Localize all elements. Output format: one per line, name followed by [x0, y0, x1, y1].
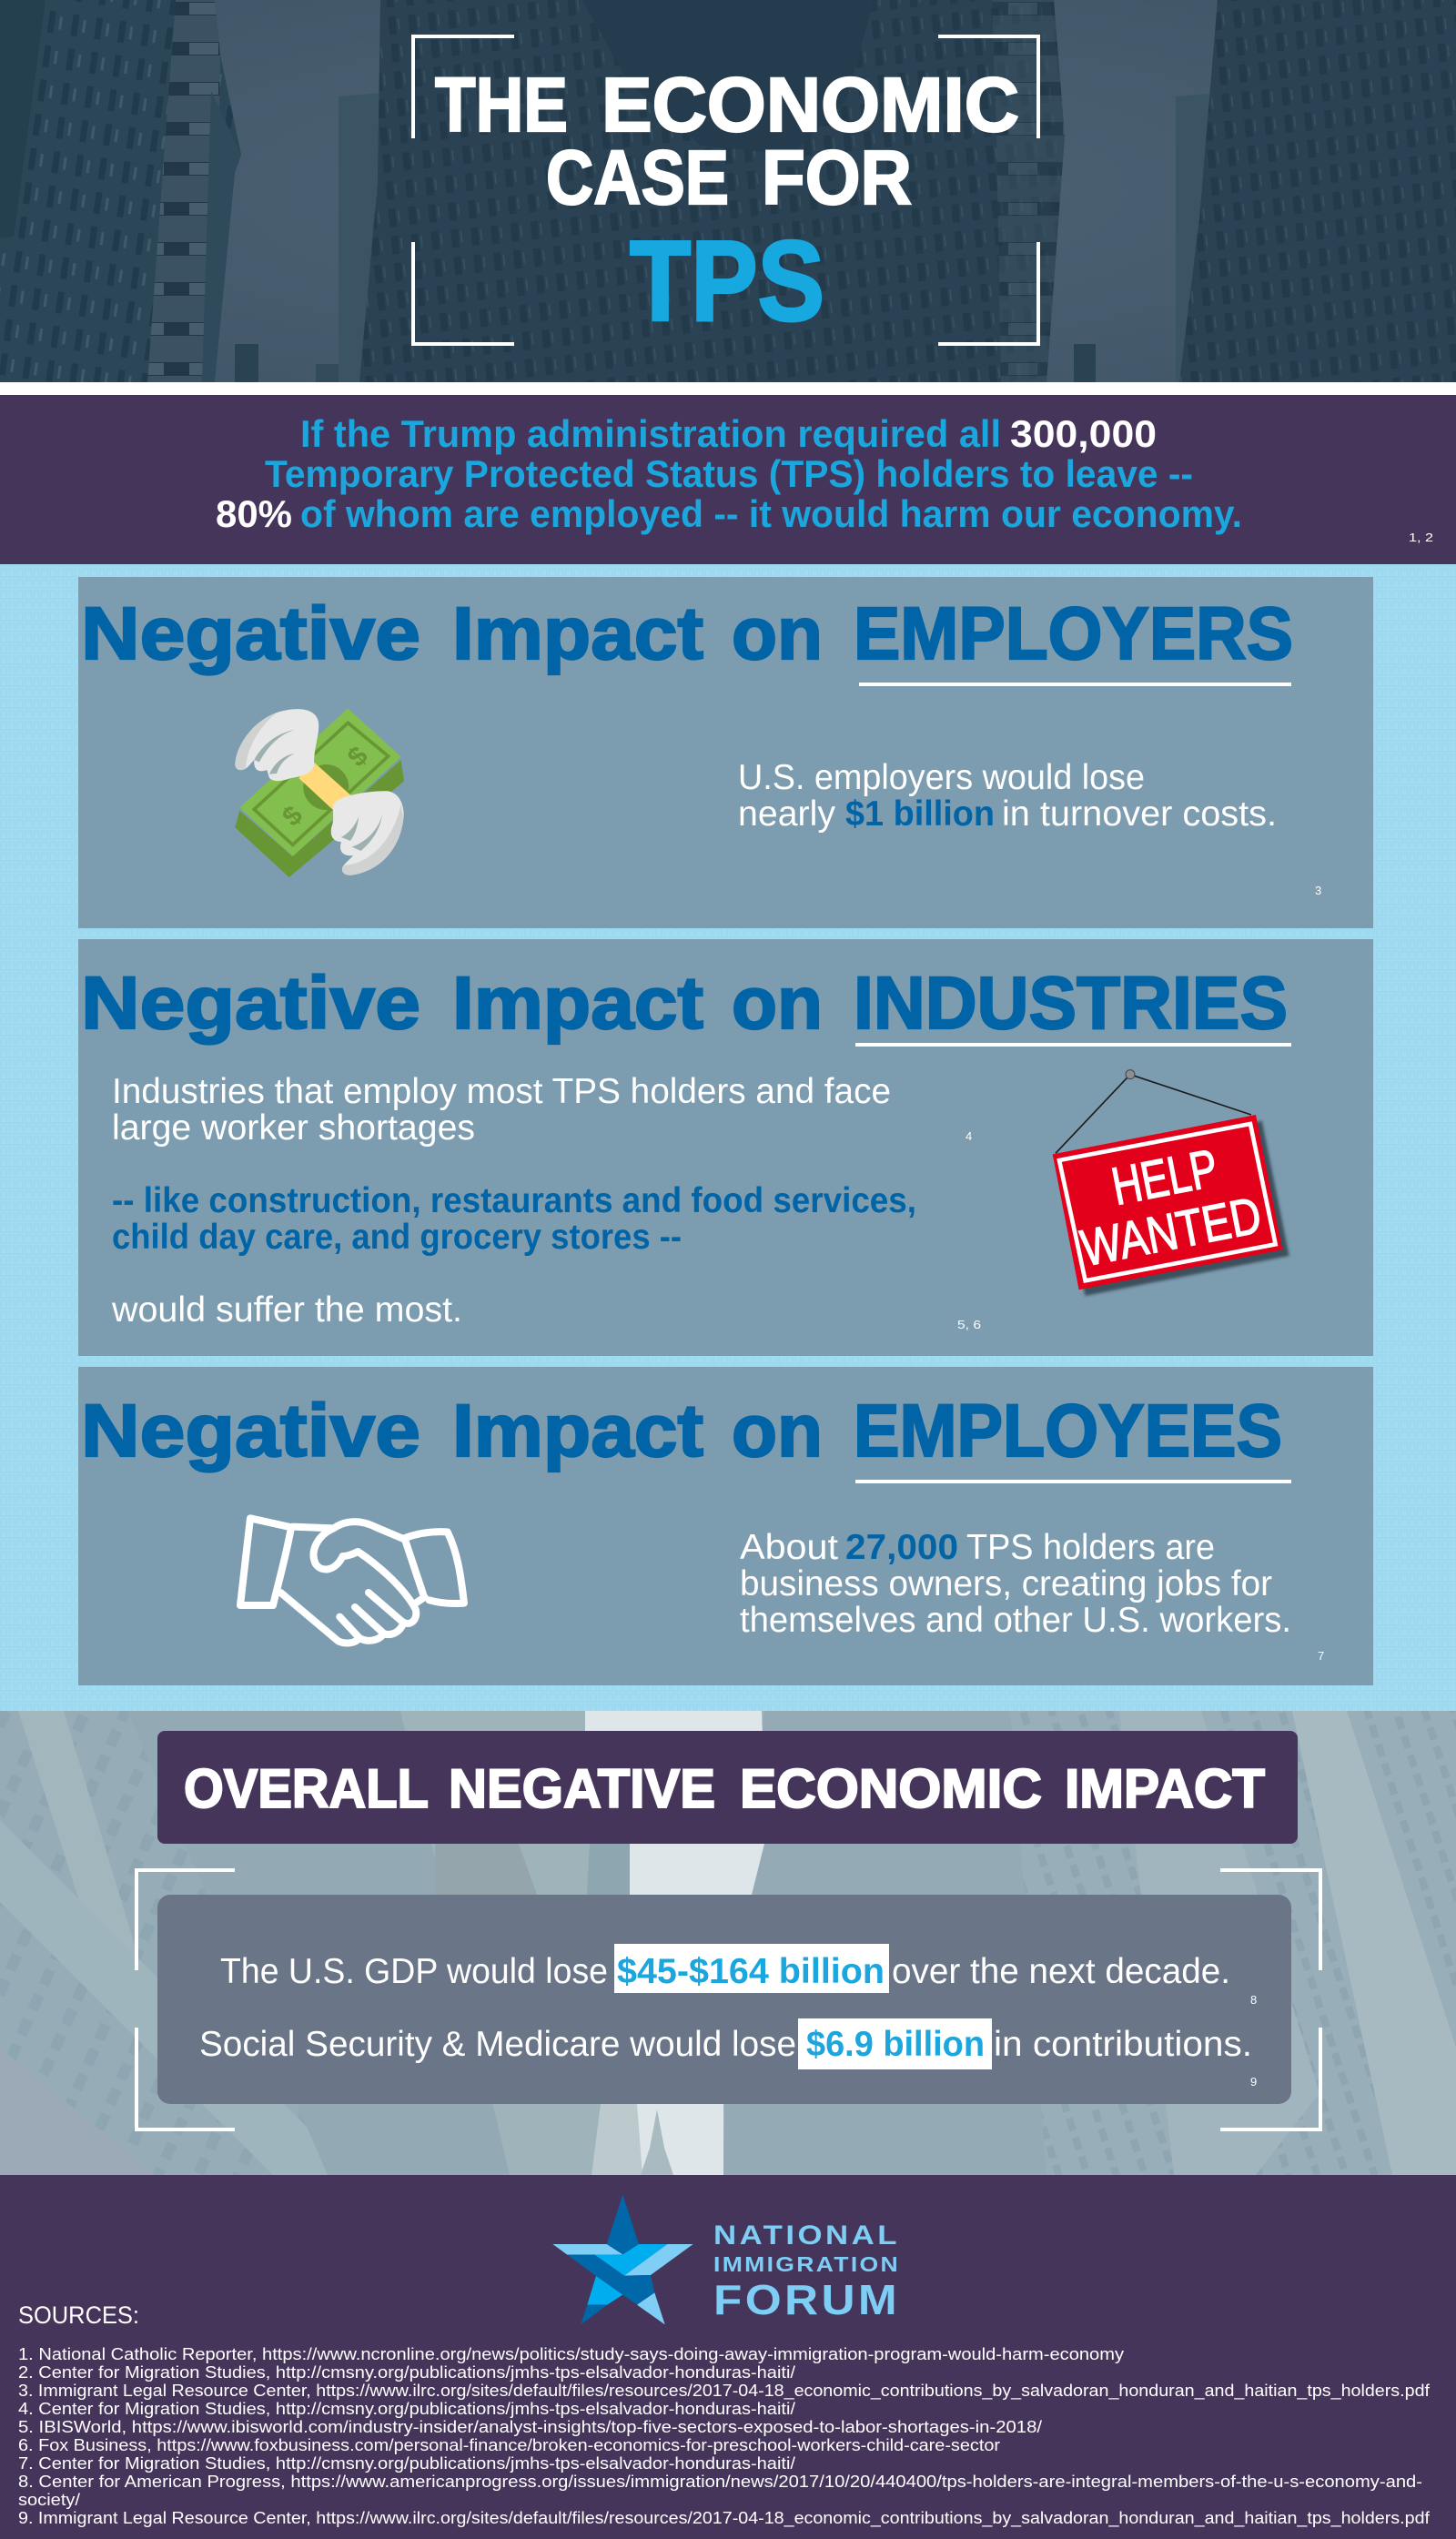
- intro band: If the Trump administration required all: [300, 412, 1001, 455]
- hero title frame brackets: [413, 36, 1038, 344]
- icon: help wanted sign: [1053, 1070, 1289, 1296]
- icon: help wanted sign: WANTED: [1077, 1187, 1266, 1278]
- overall impact heading: [157, 1731, 1298, 1844]
- intro band: Temporary Protected Status (TPS) holders to leave --: [265, 452, 1193, 495]
- heading: industries: INDUSTRIES: [854, 962, 1288, 1045]
- icon: help wanted sign: HELP: [1107, 1138, 1222, 1217]
- panel: overall impact figures: over the next decade.: [892, 1952, 1230, 1991]
- intro band: [0, 395, 1456, 564]
- sources list: 1. National Catholic Reporter, https://www.ncronline.org/news/politics/study-says-doing-away-immigration-program-would-harm-economy: [18, 2345, 1124, 2363]
- logo: National Immigration Forum: [552, 2195, 900, 2324]
- text: industries: Industries that employ most TPS holders and face: [112, 1072, 891, 1111]
- heading: employees: EMPLOYEES: [854, 1390, 1282, 1472]
- impact frame brackets: [136, 1870, 1320, 2129]
- panel: overall impact figures: 8: [1250, 1993, 1257, 2007]
- sources list: [18, 2345, 1431, 2528]
- heading: industries: Negative: [81, 962, 420, 1045]
- heading: employees: [81, 1390, 1291, 1483]
- sources list: 5. IBISWorld, https://www.ibisworld.com/industry-insider/analyst-insights/top-five-sectors-exposed-to-labor-shortages-in-2018/: [18, 2418, 1042, 2436]
- footer band: [0, 2175, 1456, 2539]
- text: employers: nearly: [738, 794, 835, 834]
- text: industries: large worker shortages: [112, 1108, 475, 1148]
- heading: employers: [81, 592, 1293, 686]
- sources list: 3. Immigrant Legal Resource Center, https://www.ilrc.org/sites/default/files/resources/2017-04-18_economic_contributions_by_salvadoran_honduran_and_haitian_tps_holders.pdf: [18, 2382, 1431, 2401]
- heading: employees: Impact: [452, 1390, 703, 1472]
- icon: money with wings: [235, 708, 404, 877]
- hero title: [435, 62, 1019, 345]
- intro band: 300,000: [1010, 412, 1157, 455]
- heading: employers: EMPLOYERS: [854, 592, 1293, 675]
- text: employees: 7: [1318, 1649, 1324, 1663]
- panel: overall impact figures: $6.9 billion: [806, 2025, 985, 2064]
- text: employers: in turnover costs.: [1002, 794, 1277, 834]
- logo: National Immigration Forum: IMMIGRATION: [713, 2252, 900, 2276]
- heading: employers: Impact: [452, 592, 703, 675]
- light blue background: [0, 564, 1456, 1711]
- text: industries: would suffer the most.: [111, 1290, 462, 1330]
- logo: National Immigration Forum: NATIONAL: [713, 2220, 900, 2251]
- intro band: of whom are employed -- it would harm our economy.: [300, 492, 1242, 535]
- panel: industries: [78, 939, 1373, 1356]
- sources list: 8. Center for American Progress, https://www.americanprogress.org/issues/immigration/news/2017/10/20/440400/tps-holders-are-integral-members-of-the-u-s-economy-and-: [18, 2473, 1422, 2491]
- icon: handshake: [240, 1518, 464, 1644]
- text: industries: child day care, and grocery stores --: [112, 1218, 682, 1257]
- text: industries: [111, 1072, 981, 1331]
- intro band: 1, 2: [1409, 531, 1433, 544]
- sources list: 4. Center for Migration Studies, http://cmsny.org/publications/jmhs-tps-elsalvador-honduras-haiti/: [18, 2400, 795, 2418]
- text: industries: -- like construction, restaurants and food services,: [112, 1181, 916, 1220]
- hero title: ECONOMIC: [602, 62, 1019, 147]
- icon: money with wings: $: [342, 741, 374, 773]
- text: employees: business owners, creating jobs for: [740, 1564, 1272, 1603]
- panel: employers: [78, 577, 1373, 928]
- heading: industries: on: [732, 962, 823, 1045]
- heading: employees: Negative: [81, 1390, 420, 1472]
- text: industries: 5, 6: [957, 1318, 981, 1331]
- panel: overall impact figures: Social Security & Medicare would lose: [199, 2025, 796, 2064]
- panel: overall impact figures: [157, 1895, 1291, 2104]
- overall impact heading: ECONOMIC: [740, 1758, 1042, 1819]
- intro band: 80%: [216, 492, 292, 535]
- text: employers: [738, 758, 1321, 897]
- sources heading: SOURCES:: [18, 2301, 139, 2329]
- sources list: 7. Center for Migration Studies, http://cmsny.org/publications/jmhs-tps-elsalvador-honduras-haiti/: [18, 2454, 795, 2473]
- text: employers: $1 billion: [845, 794, 995, 834]
- panel: overall impact figures: The U.S. GDP would lose: [220, 1952, 608, 1991]
- hero title: CASE: [546, 135, 729, 220]
- panel: overall impact figures: $45-$164 billion: [617, 1952, 885, 1991]
- heading: employers: Negative: [81, 592, 420, 675]
- hero title: TPS: [630, 218, 824, 345]
- panel: overall impact figures: in contributions.: [994, 2025, 1252, 2064]
- icon: money with wings: $: [277, 800, 308, 833]
- text: employees: About: [740, 1528, 838, 1567]
- heading: employees: on: [732, 1390, 823, 1472]
- hero title: FOR: [762, 135, 912, 220]
- hero title: THE: [435, 62, 568, 147]
- panel: overall impact figures: 9: [1250, 2075, 1257, 2089]
- text: employees: TPS holders are: [966, 1528, 1215, 1567]
- text: employees: themselves and other U.S. workers.: [740, 1601, 1291, 1640]
- text: employers: U.S. employers would lose: [738, 758, 1145, 797]
- sources list: 6. Fox Business, https://www.foxbusiness.com/personal-finance/broken-economics-for-preschool-workers-child-care-sector: [18, 2436, 1000, 2454]
- overall impact heading: IMPACT: [1065, 1758, 1265, 1819]
- heading: employers: on: [732, 592, 823, 675]
- text: employers: 3: [1315, 884, 1321, 897]
- overall impact heading: NEGATIVE: [449, 1758, 715, 1819]
- sources list: society/: [18, 2491, 80, 2509]
- sources list: 9. Immigrant Legal Resource Center, https://www.ilrc.org/sites/default/files/resources/2017-04-18_economic_contributions_by_salvadoran_honduran_and_haitian_tps_holders.pdf: [18, 2509, 1431, 2528]
- text: employees: [740, 1528, 1324, 1663]
- overall impact photo background: [0, 1711, 1456, 2175]
- panel: employees: [78, 1367, 1373, 1685]
- text: industries: 4: [966, 1129, 972, 1143]
- logo: National Immigration Forum: FORUM: [713, 2276, 900, 2323]
- text: employees: 27,000: [845, 1528, 958, 1567]
- heading: industries: Impact: [452, 962, 703, 1045]
- sources list: 2. Center for Migration Studies, http://cmsny.org/publications/jmhs-tps-elsalvador-honduras-haiti/: [18, 2363, 795, 2382]
- hero photo background: city buildings: [0, 0, 1456, 382]
- heading: industries: [81, 962, 1291, 1047]
- overall impact heading: OVERALL: [184, 1758, 429, 1819]
